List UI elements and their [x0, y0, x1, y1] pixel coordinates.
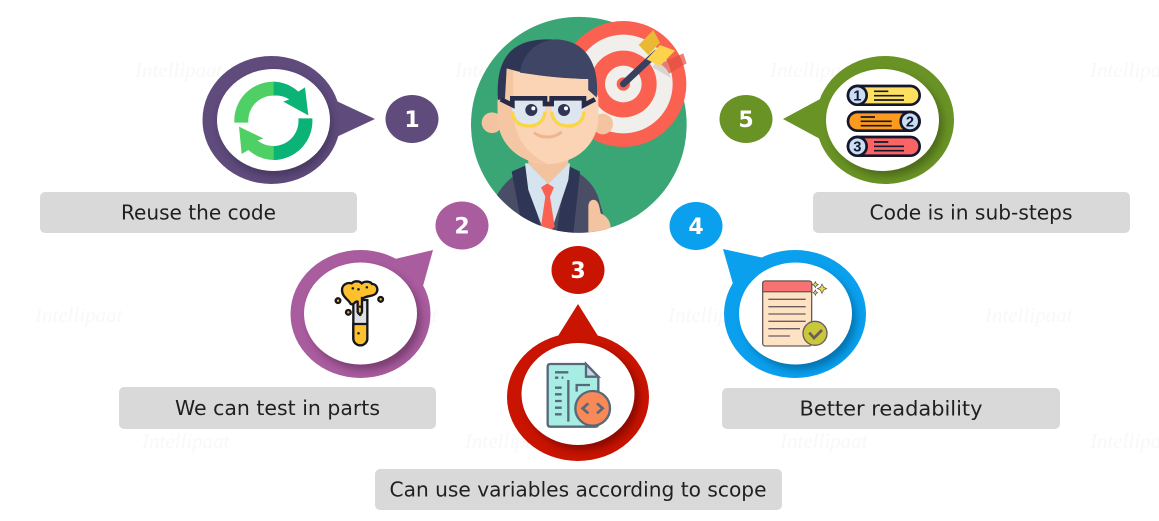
mouth [535, 133, 561, 137]
icon: numbered steps [848, 86, 920, 156]
text: Intellipaat [667, 303, 757, 327]
panel: 4 better readability [670, 202, 1060, 429]
central illustration: man with target [471, 17, 687, 243]
bubble 3 [507, 304, 649, 461]
bubble 4 [723, 249, 866, 378]
text: Intellipaat [134, 58, 224, 82]
number badge 4 [670, 202, 722, 250]
panel: 1 reuse the code [40, 56, 438, 233]
bubble 5 [783, 56, 954, 184]
face [498, 60, 598, 164]
text: Intellipaat [769, 58, 859, 82]
glasses [501, 98, 595, 127]
text: Intellipaat [349, 303, 439, 327]
icon: test tube [336, 281, 383, 345]
label box 1: Reuse the code [121, 200, 276, 224]
icon: checked note [763, 281, 827, 346]
text: Intellipaat [779, 429, 869, 453]
number badge 5 [720, 95, 772, 143]
label box 5: Code is in sub-steps [870, 200, 1072, 224]
number badge 2 [436, 202, 488, 250]
label box 3: Can use variables according to scope [390, 478, 766, 502]
label box 4 [722, 388, 1060, 429]
bubble 2 [290, 250, 433, 378]
icon: green refresh arrows [234, 82, 312, 160]
label box 2 [119, 387, 436, 429]
icon: numbered steps: 1 [853, 89, 861, 105]
green background circle [471, 17, 687, 232]
text: Intellipaat [34, 303, 124, 327]
panel: 5 code is in sub-steps [720, 56, 1130, 233]
tie [541, 183, 555, 233]
neck [528, 160, 568, 184]
bubble 1 [202, 56, 375, 184]
label box 5 [813, 192, 1130, 233]
number badge 3: 3 [570, 259, 586, 284]
icon: numbered steps: 3 [853, 140, 861, 156]
text: Intellipaat [141, 429, 231, 453]
number badge 1 [386, 95, 438, 143]
text: Intellipaat [464, 429, 554, 453]
label box 3 [375, 469, 782, 510]
number badge 2: 2 [454, 214, 470, 240]
number badge 5: 5 [738, 108, 754, 133]
man [497, 160, 611, 233]
number badge 4: 4 [688, 215, 704, 240]
label box 4: Better readability [800, 396, 983, 420]
number badge 1: 1 [404, 108, 420, 133]
ears [482, 112, 502, 133]
suit and shirt [497, 174, 607, 233]
icon: numbered steps: 2 [906, 115, 914, 131]
panel: 3 variables according to scope [375, 246, 782, 510]
icon: code file [548, 364, 610, 427]
icon: target with arrow [560, 21, 687, 147]
hair [498, 39, 597, 100]
label box 1 [40, 192, 357, 233]
text: Intellipaat [454, 58, 544, 82]
label box 2: We can test in parts [175, 396, 380, 420]
panel: 2 we can test in parts [119, 202, 488, 429]
text: Intellipaat [984, 303, 1074, 327]
number badge 3 [552, 246, 604, 294]
thumb [588, 200, 611, 233]
